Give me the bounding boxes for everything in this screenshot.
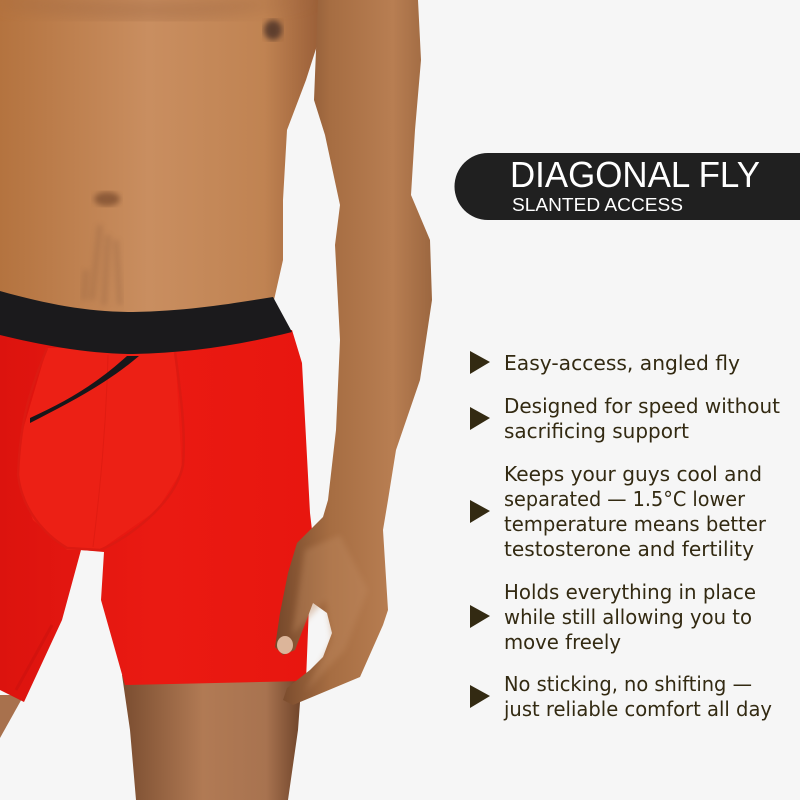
bullet 2 [470, 394, 780, 443]
bullet 5 [470, 672, 772, 721]
waistband [0, 291, 292, 354]
chest shadow [0, 0, 320, 19]
bullet 3: separated — 1.5°C lower [504, 487, 746, 511]
photo: model wearing red boxer briefs [0, 0, 432, 800]
chest nipple [264, 20, 282, 40]
torso [0, 0, 330, 320]
bullet 3: Keeps your guys cool and [504, 462, 762, 486]
diagonal fly trim [30, 356, 139, 423]
bullet 4: Holds everything in place [504, 580, 756, 604]
bullet 3 [470, 462, 767, 561]
heading pill [454, 153, 800, 220]
hand highlight [292, 535, 368, 692]
center seam [93, 355, 108, 547]
subtitle: SLANTED ACCESS [512, 195, 683, 215]
bullet 5: just reliable comfort all day [503, 697, 772, 721]
belly hair [84, 225, 120, 305]
navel [94, 192, 120, 206]
pouch seam [18, 348, 184, 550]
bullet 5: No sticking, no shifting — [504, 672, 752, 696]
title: DIAGONAL FLY [510, 154, 760, 195]
bullet 2: Designed for speed without [504, 394, 780, 418]
bullet 4: move freely [504, 630, 621, 654]
bullet 4 [470, 580, 756, 654]
right leg [122, 675, 302, 800]
bullet 3: testosterone and fertility [504, 537, 754, 561]
bullet 1: Easy-access, angled fly [504, 351, 740, 375]
left leg [0, 695, 24, 738]
bullet 4: while still allowing you to [504, 605, 752, 629]
thumbnail [277, 636, 293, 654]
left side seam [16, 625, 52, 690]
front pouch [18, 348, 182, 550]
boxer briefs [0, 330, 312, 702]
bullet 3: temperature means better [504, 512, 767, 536]
bullet 2: sacrificing support [504, 419, 689, 443]
arm and hand [275, 0, 432, 705]
